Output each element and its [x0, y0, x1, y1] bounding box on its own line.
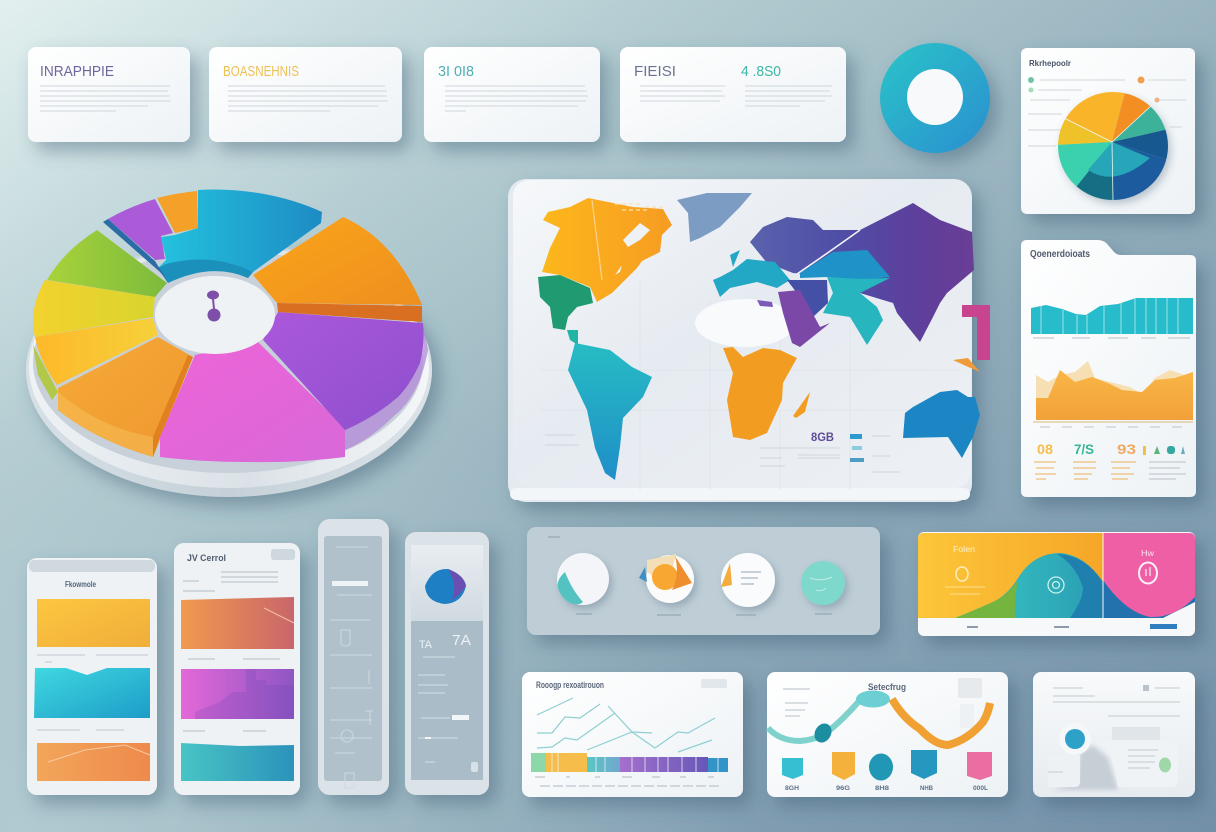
- slice: magenta: [160, 342, 345, 462]
- chart tile: cyan: [34, 668, 150, 718]
- icon: globe blob: [425, 569, 466, 604]
- map: central asia: [800, 250, 890, 280]
- panel: device card: [1033, 672, 1195, 797]
- heading: chart card: Qoenerdoioats: [1030, 249, 1090, 260]
- wave crest: [856, 690, 890, 708]
- device shadow: [1052, 745, 1118, 790]
- panel: feature eggs: [527, 527, 880, 635]
- number: phone four: 7A: [452, 632, 471, 649]
- axis labels: cyan: [1033, 337, 1190, 339]
- map: south america: [568, 343, 652, 480]
- slice: orange right: [253, 217, 422, 305]
- device lens: [1059, 723, 1091, 755]
- map: pink marker: [962, 305, 990, 360]
- panel: world map: [508, 179, 990, 502]
- panel: phone one: [27, 558, 157, 795]
- heading: phone two: JV Cerrol: [187, 553, 226, 564]
- line chart: [537, 698, 715, 752]
- slice: orange small: [157, 191, 198, 233]
- device text: [1048, 688, 1180, 772]
- tag labels: NHB: [920, 785, 933, 792]
- panel: card figures: [424, 47, 600, 142]
- big pie chart: [26, 190, 432, 497]
- device right body: [1098, 741, 1178, 787]
- wave path: orange: [892, 699, 990, 745]
- heading: figures: 3I 0I8: [438, 63, 474, 80]
- map: arabia: [778, 290, 830, 347]
- heading: infographic: INRAPHPIE: [40, 63, 114, 80]
- tag: sky: [911, 750, 937, 779]
- tag: pink: [967, 752, 992, 780]
- stat numbers: 93: [1117, 441, 1136, 457]
- map legend: [545, 434, 900, 472]
- stat icons: [1143, 446, 1185, 455]
- centre hole: [155, 276, 275, 354]
- area chart: orange: [1036, 361, 1193, 420]
- label: banner left: Folen: [953, 545, 975, 554]
- slice: orange edge: [277, 303, 422, 322]
- map: north africa highlight: [695, 299, 795, 347]
- label: banner right: Hw: [1141, 548, 1155, 558]
- panel: card infographic: [28, 47, 190, 142]
- map: gulf: [787, 280, 828, 317]
- chart tile: orange: [37, 743, 150, 781]
- panel: colour banner: [918, 532, 1195, 636]
- glass base: [26, 243, 432, 497]
- pie chart: [1056, 92, 1176, 208]
- tag: amber: [832, 752, 855, 780]
- axis labels: [535, 777, 720, 786]
- slice: orange lower: [58, 337, 193, 457]
- slice: purple side: [345, 323, 428, 450]
- panel: pie chart card: [1021, 48, 1195, 220]
- map: arctic line: [797, 230, 860, 274]
- slice: gold: [35, 318, 158, 385]
- slice: lime side: [33, 345, 58, 400]
- map: greenland: [677, 193, 752, 242]
- number: fields: 4 .8S0: [741, 63, 781, 80]
- stat numbers: 7/S: [1074, 441, 1094, 457]
- bar strip: [531, 753, 728, 772]
- banner pink: [1103, 533, 1195, 617]
- tag labels: [785, 785, 988, 792]
- stat numbers: 08: [1037, 441, 1053, 457]
- heading: business: BOASNEHNIS: [223, 63, 299, 80]
- map: india: [823, 277, 890, 345]
- map: uk: [730, 250, 740, 267]
- text block: card three: [445, 86, 588, 111]
- panel: card business: [209, 47, 402, 142]
- slice: purple small: [108, 199, 173, 260]
- slice: cyan inner band: [158, 260, 253, 283]
- tag labels: 000L: [973, 785, 988, 792]
- area chart: cyan: [1031, 298, 1193, 334]
- heading: wave: Setecfrug: [868, 682, 906, 692]
- stat captions: [1034, 462, 1186, 479]
- panel: phone four: [405, 532, 489, 795]
- map: central america: [538, 275, 593, 330]
- icon: circle badge: [880, 43, 990, 153]
- tag labels: 8GH: [785, 785, 799, 792]
- wave path: teal: [768, 697, 880, 741]
- heading: phone one: Fkowmole: [65, 580, 96, 589]
- chart tile: teal: [181, 743, 294, 781]
- map: australia: [903, 390, 980, 458]
- banner hill: [955, 553, 1103, 618]
- text block: card two: [228, 86, 388, 111]
- tag: blue oval: [869, 754, 893, 780]
- icon: egg one: [557, 553, 609, 605]
- panel: phone four: TA: [419, 639, 433, 651]
- tag: cyan: [782, 758, 803, 779]
- slice: cyan: [158, 190, 322, 283]
- heading: fields: FIEISI: [634, 63, 676, 80]
- slice: yellow: [33, 280, 155, 337]
- map: africa: [723, 347, 797, 440]
- map: madagascar: [793, 392, 810, 418]
- map: orange islands: [953, 358, 980, 372]
- panel: phone two: [174, 543, 300, 795]
- panel: line chart card: [522, 672, 743, 797]
- icon: centre mark: [207, 290, 220, 322]
- tag labels: 8H8: [875, 785, 889, 792]
- icon: egg three: [721, 553, 775, 607]
- icon: egg four: [801, 561, 845, 605]
- panel: wave card: [767, 672, 1008, 797]
- panel: chart folder card: [1021, 240, 1196, 497]
- map number: 8GB: [811, 430, 834, 444]
- slice: purple: [263, 312, 424, 430]
- heading: pie card: Rkrhepoolr: [1029, 58, 1072, 68]
- slice: green: [47, 230, 167, 297]
- icon: banner ring: [956, 567, 968, 581]
- chart tile: yellow: [37, 599, 150, 647]
- icon: egg two: [639, 554, 694, 603]
- panel: phone three: [318, 519, 389, 795]
- map: north america: [542, 198, 672, 302]
- icon: pink ring: [1139, 562, 1157, 584]
- map: isthmus: [567, 330, 578, 345]
- banner footer: [967, 626, 1069, 628]
- chart tile: coral: [181, 597, 294, 649]
- pie legend: [1028, 76, 1186, 146]
- banner blue: [1103, 578, 1195, 618]
- text block: card four: [640, 86, 832, 106]
- stat numbers: [1037, 441, 1136, 457]
- heading: line chart: Rooogp rexoatirouon: [536, 680, 604, 690]
- device left body: [1048, 755, 1080, 787]
- map: europe: [713, 259, 790, 297]
- text block: card one: [40, 86, 171, 111]
- slice: dark sliver: [103, 219, 168, 282]
- device accent: [1159, 758, 1171, 772]
- icon: spiral: [1048, 577, 1064, 593]
- panel: card fields: [620, 47, 846, 142]
- wave node: [811, 720, 835, 746]
- map: eurasia: [750, 203, 974, 342]
- tag labels: 96G: [836, 785, 850, 792]
- map: mediterranean blob: [757, 300, 773, 307]
- chart tile: purple: [181, 669, 294, 719]
